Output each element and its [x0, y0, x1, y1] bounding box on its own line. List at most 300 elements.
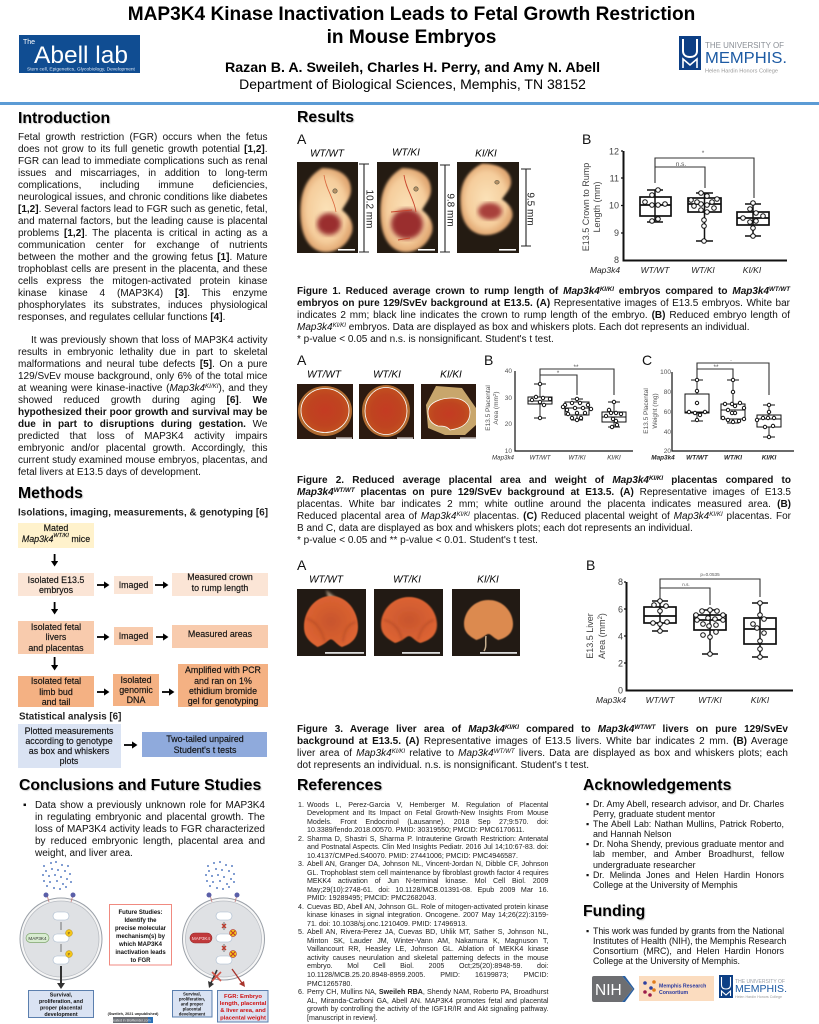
- figure 2C: placental weight box plot: Weight (mg): [652, 393, 659, 429]
- figure 2B: placental area box plot: 40: [505, 368, 512, 375]
- heading: Acknowledgements: Acknowledgements: [583, 777, 731, 794]
- figure 3B: liver area box plot: B: [586, 557, 595, 573]
- callout: future studies: precise molecular: [115, 926, 167, 932]
- figure 2B: placental area box plot: ): [493, 391, 500, 394]
- figure 3B: liver area box plot: 4: [618, 632, 623, 642]
- figure 2C: placental weight box plot: Map3k4: [651, 454, 675, 462]
- logo: University of Memphis small: [719, 975, 787, 999]
- box: t tests: Two-tailed unpaired: [166, 734, 244, 744]
- figure 1B: crown to rump box plot: 10: [609, 200, 619, 210]
- figure 3B: liver area box plot: Map3k4: [596, 695, 626, 705]
- box: measured areas: Measured areas: [188, 629, 253, 639]
- text block: introduction paragraph 1: communication center for exchange of nutrients: [18, 240, 268, 251]
- text block: acknowledgements: Perry, graduate student mentor: [593, 809, 715, 819]
- text block: references: Abell AN, Rivera-Perez JA, Cuevas BD, Uhlik MT, Sather S, Johnson NL,: [307, 928, 548, 936]
- caption: figure 1: [297, 286, 790, 344]
- text block: acknowledgements: Dr. Noha Shendy, previous graduate mentor and: [593, 839, 784, 849]
- text block: references: GL. Trophoblast stem cell maintenance by fibroblast growth factor 4 requires: [307, 869, 548, 877]
- title: MAP3K4 Kinase Inactivation Leads to Fetal Growth Restriction: [128, 4, 695, 25]
- heading: References: References: [297, 777, 382, 794]
- heading: Funding: Funding: [583, 903, 645, 920]
- caption: figure 3: Figure 3. Average liver area of Map3k4KI/KI compared to Map3k4WT/WT livers on pure 129/SvEv: [297, 724, 788, 735]
- cell: normal: MAP3K4: [28, 936, 47, 941]
- figure 1A: embryo images: A: [297, 131, 307, 147]
- figure 2B: placental area box plot: 2: [492, 393, 497, 396]
- box: mated mice: mice: [69, 534, 90, 544]
- text block: funding: ▪: [586, 926, 589, 936]
- figure 3B: liver area box plot: p=0.0535: [700, 572, 720, 577]
- figure 2B: placental area box plot: **: [573, 364, 579, 371]
- text block: references: 5.: [298, 928, 304, 936]
- box: isolated livers and placentas: Isolated fetal: [31, 622, 81, 632]
- image: WT/WT placenta: [297, 384, 353, 439]
- text block: references: 1.: [298, 801, 304, 809]
- box: impaired outcome: placental: [183, 1006, 201, 1012]
- text block: references: 2.: [298, 835, 304, 843]
- logo: Memphis Research Consortium: [639, 976, 714, 1001]
- text block: references: Models. Front Endocrinol (Lausanne). 2018 Sep 27;9:570. doi:: [307, 818, 548, 826]
- box: FGR outcome: FGR: Embryo: [224, 994, 262, 1000]
- text block: references: Abell AN, Granger DA, Johnson NL, Vincent-Jordan N, Dibble CF, Johnson: [307, 860, 548, 868]
- caption: figure 2: Map3k4WT/WT placentas on pure 129/SvEv background at E13.5. (A) Representative images of E13.5: [297, 487, 791, 498]
- text block: acknowledgements: College at the University of Memphis: [593, 880, 738, 890]
- rule: header divider: [0, 102, 819, 104]
- box: normal outcome: development: [44, 1012, 78, 1018]
- figure 2C: placental weight box plot: KI/KI: [762, 454, 776, 462]
- logo: University of Memphis small: MEMPHIS.: [735, 984, 787, 995]
- figure 1A: embryo images: WT/WT: [310, 148, 345, 160]
- text block: references: 10.1128/MCB.25.20.8948-8959.2005. PMID: 16199873; PMCID:: [307, 971, 548, 979]
- caption: figure 1: * p-value < 0.05 and n.s. is nonsignificant. Student's t test.: [297, 334, 554, 344]
- heading: Results: Results: [297, 109, 354, 126]
- text block: references: 10.4137/CMPed.S40070. PMID: 27441006; PMCID: PMC4946587.: [307, 852, 518, 860]
- text block: introduction paragraph 2: [18, 335, 268, 478]
- text block: introduction paragraph 1: kinase kinase 4 (MAP3K4) [3]. This enzyme: [18, 288, 268, 299]
- caption: figure 1: indicates 2 mm; black line indicates the crown to rump length of the embryo. (B) Reduced embryo length of: [297, 310, 790, 320]
- figure 3B: liver area box plot: 8: [618, 577, 623, 587]
- text block: introduction paragraph 2: predicted that loss of MAP3K4 activity impairs: [18, 431, 268, 442]
- text block: references: kinase kinases in signal integration. Oncogene. 2007 May 14;26(22):3159-: [307, 911, 548, 919]
- box: t tests: [142, 732, 267, 757]
- figure 1B: crown to rump box plot: KI/KI: [743, 265, 762, 275]
- figure 2B: placental area box plot: 20: [505, 421, 512, 428]
- callout: future studies: Identify the: [124, 918, 157, 924]
- image: KI/KI embryo: [457, 162, 519, 253]
- box: normal outcome: proper placental: [40, 1006, 82, 1012]
- figure 2C: placental weight box plot: 40: [664, 429, 671, 436]
- text block: conclusion bullet: ▪: [23, 800, 27, 811]
- figure 1B: crown to rump box plot: *: [702, 150, 705, 157]
- text block: introduction paragraph 2: embryonic and/or placental growth. Accordingly, this: [18, 443, 268, 454]
- text block: acknowledgements: [586, 798, 784, 890]
- text block: introduction paragraph 1: trophoblast cells are present in the placenta, and these: [18, 264, 268, 275]
- box: plotted measurements: as box and whiskers: [29, 746, 110, 756]
- logo: Memphis Research Consortium: Memphis Research: [659, 984, 706, 990]
- figure 2B: placental area box plot: Map3k4: [492, 454, 515, 462]
- logo: Abell lab: Stem cell, Epigenetics, Glycobiology, Development: [27, 66, 136, 72]
- text block: introduction paragraph 1: does not grow to its full genetic growth potential [1,2].: [18, 144, 268, 155]
- text block: references: 10.3389/fendo.2018.00570. PMID: 30319550; PMCID: PMC6170611.: [307, 826, 525, 834]
- text block: introduction paragraph 2: showed reduced growth during aging [6]. We: [18, 395, 268, 406]
- figure 2A: placenta images: A: [297, 352, 307, 368]
- text block: references: and Postnatal Aspects. Clin Med Insights Pediatr. 2016 Jul 14;10:67-83. doi:: [307, 843, 548, 851]
- text block: references: [298, 801, 548, 1022]
- text block: introduction paragraph 2: current study examined mouse embryos, placentas, and: [18, 455, 268, 466]
- text block: introduction paragraph 1: FGR can lead to immediate complications such as renal: [18, 156, 268, 167]
- figure 2B: placental area box plot: Area (mm: [493, 396, 500, 425]
- figure 2C: placental weight box plot: **: [713, 364, 719, 371]
- box: FGR outcome: placental weight: [220, 1016, 266, 1022]
- credit: BioRender: (Sweileh, 2021 unpublished): [108, 1012, 159, 1016]
- box: t tests: Student's t tests: [174, 745, 237, 755]
- image: WT/KI liver: [374, 589, 443, 656]
- text block: introduction paragraph 1: and maternal factors, but the leading cause is placental: [18, 216, 268, 227]
- image: WT/WT embryo: [297, 162, 358, 253]
- text block: acknowledgements: and Hannah Nelson: [593, 829, 671, 839]
- figure 2C: placental weight box plot: .: [730, 356, 732, 363]
- box: PCR genotyping: and ran on 1%: [194, 676, 252, 686]
- text block: references: Minton SK, Lauder JM, Winter-Vann AM, Nakamura K, Magnuson T,: [307, 937, 548, 945]
- box: PCR genotyping: Amplified with PCR: [185, 665, 261, 675]
- arrows: flow: [55, 554, 173, 745]
- text block: introduction paragraph 2: at weaning were kinase-inactive (Map3k4KI/KI), and they: [18, 383, 267, 394]
- text block: acknowledgements: Dr. Melinda Jones and Helen Hardin Honors: [593, 870, 784, 880]
- figure 1A: embryo images: [297, 131, 536, 254]
- caption: figure 2: Reduced placental area of Map3k4KI/KI placentas. (C) Reduced placental weight of Map3k4KI/KI placentas. For: [297, 511, 791, 522]
- figure 3B: liver area box plot: ): [597, 613, 607, 616]
- figure 2B: placental area box plot: [484, 352, 633, 462]
- box: isolated embryos: [18, 573, 94, 596]
- box: isolated genomic DNA: Isolated: [120, 675, 152, 685]
- caption: figure 2: [297, 475, 791, 546]
- image: WT/KI placenta: [359, 384, 414, 439]
- figure 2C: placental weight box plot: WT/WT: [686, 454, 709, 462]
- text block: references: Perry CH, Mullins NA, Sweileh RBA, Shendy NAM, Roberto PA, Broadhurst: [307, 988, 548, 996]
- figure 2C: placental weight box plot: 80: [664, 389, 671, 396]
- box: isolated embryos: embryos: [39, 585, 74, 595]
- text block: introduction paragraph 1: problems [1,2]. The placenta is critical in acting as a: [18, 228, 268, 239]
- figure 3B: liver area box plot: 0: [618, 686, 623, 696]
- box: PCR genotyping: ethidium bromide: [189, 686, 257, 696]
- text block: introduction paragraph 1: [1,2]. Several factors lead to FGR such as genetic, fetal,: [18, 204, 268, 215]
- box: plotted measurements: according to genotype: [25, 736, 113, 746]
- text block: references: 4.: [298, 903, 304, 911]
- box: impaired outcome: and proper: [181, 1002, 204, 1006]
- box: normal outcome: [28, 990, 94, 1018]
- logo: University of Memphis: THE UNIVERSITY OF: [705, 41, 784, 50]
- figure 2C: placental weight box plot: 20: [664, 448, 671, 455]
- box: isolated embryos: Isolated E13.5: [28, 575, 84, 585]
- callout: future studies: Future Studies:: [118, 910, 163, 916]
- figure 3A: liver images: WT/KI: [393, 574, 421, 586]
- figure 3A: liver images: WT/WT: [309, 574, 344, 586]
- text block: references: Woods L, Perez-Garcia V, Hemberger M. Regulation of Placental: [307, 801, 548, 809]
- logo: University of Memphis small: Helen Hardin Honors College: [735, 995, 782, 999]
- callout: future studies: [110, 904, 172, 965]
- text block: introduction paragraph 1: Fetal growth restriction (FGR) occurs when the fetus: [18, 132, 268, 143]
- figure 1B: crown to rump box plot: [581, 131, 787, 275]
- figure 2A: placenta images: KI/KI: [440, 370, 462, 380]
- figure 2B: placental area box plot: WT/KI: [568, 454, 586, 462]
- box: mated mice: Map3k4: [22, 534, 53, 544]
- figure 2B: placental area box plot: E13.5 Placental: [485, 385, 492, 431]
- box: isolated livers and placentas: livers: [46, 632, 67, 642]
- figure 1A: embryo images: 9.8 mm: [444, 193, 456, 227]
- figure 3B: liver area box plot: n.s.: [682, 582, 690, 587]
- logo: Memphis Research Consortium: Consortium: [659, 990, 688, 996]
- subheading: statistical analysis: Statistical analysis [6]: [19, 712, 121, 722]
- text block: acknowledgements: Dr. Amy Abell, research advisor, and Dr. Charles: [593, 798, 784, 808]
- text block: funding: College at the University of Memphis.: [593, 956, 740, 966]
- logo: NIH: NIH: [595, 982, 622, 999]
- figure 1A: embryo images: 9.5 mm: [524, 192, 536, 226]
- figure 3B: liver area box plot: E13.5 Liver: [585, 613, 595, 659]
- logo: Abell lab: The: [23, 39, 35, 46]
- box: imaged 2: [114, 627, 153, 645]
- text block: references: PMID: 19289495; PMCID: PMC2682043.: [307, 894, 436, 902]
- box: isolated genomic DNA: [113, 674, 159, 706]
- figure 2B: placental area box plot: WT/WT: [530, 454, 552, 462]
- figure 3B: liver area box plot: 2: [598, 615, 604, 619]
- text block: introduction paragraph 1: issues and miscarriages, in addition to long-term: [18, 168, 268, 179]
- title: [128, 4, 695, 48]
- title: in Mouse Embryos: [327, 27, 496, 48]
- text block: references: embryo. Mol Cell Biol. 2005 Oct;25(20):8948-59. doi:: [307, 962, 548, 970]
- figure 2B: placental area box plot: KI/KI: [607, 454, 621, 462]
- figure 2A: placenta images: [297, 352, 476, 439]
- text block: introduction paragraph 1: cells express the mitogen-activated protein kinase: [18, 276, 268, 287]
- figure 1B: crown to rump box plot: 8: [614, 255, 619, 265]
- box: mated mice: Mated: [44, 523, 68, 533]
- box: normal outcome: proliferation, and: [39, 999, 83, 1005]
- cell: normal: P: [68, 952, 71, 956]
- box: isolated limb bud: limb bud: [39, 687, 73, 697]
- box: measured crown to rump: Measured crown: [187, 572, 253, 582]
- credit: BioRender: [108, 1012, 159, 1023]
- caption: figure 2: * p-value < 0.05 and ** p-value < 0.01. Student's t test.: [297, 535, 538, 546]
- text block: references: activity causes neurulation and skeletal patterning defects in the mouse: [307, 954, 548, 962]
- text block: conclusion bullet: Data show a previously unknown role for MAP3K4: [35, 800, 265, 811]
- box: imaged 1: Imaged: [119, 580, 148, 590]
- caption: figure 1: Figure 1. Reduced average crown to rump length of Map3k4KI/KI embryos compared to Map3k4WT/WT: [297, 286, 790, 296]
- caption: figure 3: [297, 724, 788, 771]
- box: imaged 2: Imaged: [119, 631, 148, 641]
- text block: acknowledgements: The Abell Lab: Nathan Mullins, Patrick Roberto,: [593, 819, 784, 829]
- text block: conclusion bullet: in regulating embryonic and placental growth. The: [35, 812, 265, 823]
- text block: introduction paragraph 2: It was previously shown that loss of MAP3K4 activity: [31, 335, 268, 346]
- text block: references: AL, Miranda-Carboni GA, Abell AN. MAP3K4 promotes fetal and placental: [307, 997, 548, 1005]
- text block: references: 6.: [298, 988, 304, 996]
- text block: references: 3.: [298, 860, 304, 868]
- text block: funding: Consortium (MRC), and Helen Hardin Honors: [593, 946, 784, 956]
- cell: MAP3K4 inactive: [182, 861, 264, 988]
- logo: University of Memphis: MEMPHIS.: [705, 50, 787, 67]
- text block: introduction paragraph 2: fetal livers at E13.5 days of development.: [18, 467, 201, 478]
- text block: introduction paragraph 1: neurological issues, and chronic conditions like diabetes: [18, 192, 268, 203]
- box: plotted measurements: [18, 724, 121, 768]
- flow chart: methods: [18, 508, 268, 768]
- text block: references: PMC1265780.: [307, 980, 352, 988]
- text block: acknowledgements: ▪: [586, 819, 589, 829]
- box: FGR outcome: & liver area, and: [220, 1008, 266, 1014]
- text block: acknowledgements: ▪: [586, 870, 589, 880]
- logo: University of Memphis: Helen Hardin Honors College: [705, 68, 778, 74]
- box: isolated limb bud: and tail: [42, 697, 70, 707]
- figure 3B: liver area box plot: KI/KI: [751, 695, 770, 705]
- caption: figure 3: dot represents an individual. n.s. is nonsignificant. Student's t test.: [297, 760, 589, 771]
- figure 2C: placental weight box plot: 60: [664, 409, 671, 416]
- figure 2B: placental area box plot: B: [484, 352, 493, 368]
- text block: introduction paragraph 1: responses, and regulates cellular functions [4].: [18, 312, 225, 323]
- box: PCR genotyping: [178, 664, 268, 707]
- figure 1B: crown to rump box plot: Map3k4: [590, 265, 620, 275]
- affiliation: Department of Biological Sciences, Memphis, TN 38152: [239, 76, 586, 92]
- text block: funding: [586, 926, 786, 966]
- text block: funding: Institutes of Health (NIH), the Memphis Research: [593, 936, 786, 946]
- figure 1A: embryo images: KI/KI: [475, 148, 497, 160]
- heading: Introduction: Introduction: [18, 110, 110, 127]
- diagram: signaling model: [20, 861, 268, 1023]
- figure 1A: embryo images: WT/KI: [392, 148, 420, 158]
- text block: introduction paragraph 2: 129/SvEv mouse background, only 6% of the total mice: [18, 371, 268, 382]
- cell: normal: P: [68, 930, 71, 936]
- text block: references: MEKK4 activation of Jun N-terminal kinase. Mol Cell Biol. 2009: [307, 877, 548, 885]
- text block: introduction paragraph 2: hypothesized their poor growth and survival may be: [18, 407, 268, 418]
- figure 3B: liver area box plot: Area (mm: [597, 619, 607, 659]
- text block: introduction paragraph 1: between the mother and the growing fetus [1]. Mature: [18, 252, 268, 263]
- figure 3B: liver area box plot: 6: [618, 604, 623, 614]
- image: KI/KI liver: [452, 589, 520, 656]
- box: impaired outcome: development: [179, 1012, 206, 1016]
- image: WT/WT liver: [297, 589, 366, 656]
- logo: University of Memphis: [679, 36, 787, 74]
- text block: introduction paragraph 1: phosphorylates its substrates, induces physiological: [18, 300, 268, 311]
- text block: references: Vaillancourt RR, Heasley LE, Johnson GL. Ablation of MEKK4 kinase: [307, 945, 548, 953]
- box: mated mice: [18, 523, 94, 548]
- heading: Methods: Methods: [18, 485, 83, 502]
- text block: introduction paragraph 2: malformations and neural tube defects [5]. On a pure: [18, 359, 268, 370]
- text block: references: Cuevas BD, Abell AN, Johnson GL. Role of mitogen-activated protein kinase: [307, 903, 548, 911]
- figure 2C: placental weight box plot: WT/KI: [724, 454, 742, 462]
- text block: funding: This work was funded by grants from the National: [593, 926, 784, 936]
- figure 1B: crown to rump box plot: Length (mm): [592, 181, 602, 233]
- box: isolated limb bud: [18, 676, 94, 707]
- caption: figure 2: placentas. White bar indicates 2 mm; white outline around the placenta indicates measured area. (B): [297, 499, 791, 510]
- figure 3A: liver images: KI/KI: [477, 574, 499, 586]
- figure 3A: liver images: A: [297, 557, 307, 573]
- cell: MAP3K4 inactive: MAP3K4: [192, 936, 211, 941]
- figure 1B: crown to rump box plot: n.s.: [676, 161, 686, 168]
- figure 2C: placental weight box plot: 100: [660, 369, 671, 376]
- box: impaired outcome: [172, 990, 212, 1017]
- box: normal outcome: Survival,: [50, 992, 73, 998]
- text block: references: 71. doi: 10.1038/sj.onc.1210409. PMID: 17496913.: [307, 920, 467, 928]
- credit: BioRender: Created in BioRender.com: [109, 1018, 151, 1022]
- box: plotted measurements: plots: [60, 756, 79, 766]
- caption: figure 3: background at E13.5. (A) Representative images of E13.5 livers. White bar indicates 2 mm. (B) Average: [297, 736, 788, 747]
- text block: introduction paragraph 2: results in embryonic lethality due in part to skeletal: [18, 347, 268, 358]
- callout: future studies: to FGR: [130, 958, 151, 964]
- text block: acknowledgements: lab member, and Amber Broadhurst, fellow: [593, 849, 784, 859]
- text block: conclusion bullet: by reduced embryonic length, placental area and: [35, 836, 265, 847]
- text block: acknowledgements: ▪: [586, 798, 589, 808]
- figure 2B: placental area box plot: *: [557, 370, 560, 377]
- text block: references: growth by controlling the activity of the IGF1R/IR and Akt signaling pathway.: [307, 1005, 548, 1013]
- subheading: isolations: Isolations, imaging, measurements, & genotyping [6]: [18, 508, 268, 518]
- text block: acknowledgements: undergraduate researcher: [593, 860, 696, 870]
- text block: introduction paragraph 1: complications, including immune deficiencies,: [18, 180, 268, 191]
- figure 2C: placental weight box plot: C: [642, 352, 652, 368]
- box: impaired outcome: proliferation,: [179, 996, 205, 1002]
- text block: references: [manuscript in review].: [307, 1014, 378, 1022]
- box: measured crown to rump: to rump length: [192, 583, 248, 593]
- figure 1B: crown to rump box plot: 9: [614, 228, 619, 238]
- figure 1B: crown to rump box plot: B: [582, 131, 591, 147]
- figure 1B: crown to rump box plot: WT/KI: [691, 265, 715, 275]
- callout: future studies: inactivation leads: [115, 950, 166, 956]
- callout: future studies: mechanism(s) by: [116, 934, 166, 940]
- box: FGR outcome: length, placental: [220, 1001, 267, 1007]
- cell: normal: [20, 861, 102, 989]
- measurement bars: [359, 164, 531, 252]
- caption: figure 2: Figure 2. Reduced average placental area and weight of Map3k4KI/KI placentas compared to: [297, 475, 791, 486]
- figure 1B: crown to rump box plot: WT/WT: [641, 265, 670, 275]
- heading: Conclusions and Future Studies: Conclusions and Future Studies: [19, 777, 261, 794]
- text block: conclusion bullet: [23, 800, 265, 859]
- box: mated mice: WT/KI: [53, 533, 69, 539]
- text block: introduction paragraph 2: due in part to disruptions during gestation. We: [18, 419, 268, 430]
- box: FGR outcome: [218, 990, 268, 1022]
- caption: figure 3: liver area of Map3k4KI/KI relative to Map3k4WT/WT livers. Data are displayed as box and whiskers plots; each: [297, 748, 788, 759]
- box: isolated genomic DNA: genomic: [119, 685, 153, 695]
- logo: NIH: [592, 976, 634, 1002]
- text block: references: May;29(10):2748-61. doi: 10.1128/MCB.01391-08. Epub 2009 Mar 16.: [307, 886, 548, 894]
- figure 2B: placental area box plot: 30: [505, 395, 512, 402]
- figure 3B: liver area box plot: [585, 557, 793, 705]
- authors: Razan B. A. Sweileh, Charles H. Perry, and Amy N. Abell: [225, 60, 600, 76]
- caption: figure 1: Map3k4KI/KI embryos. Data are displayed as box and whiskers plots. Each dot represents an individual.: [297, 322, 750, 332]
- box: isolated livers and placentas: [18, 621, 94, 654]
- text block: conclusion bullet: loss of MAP3K4 activity leads to FGR characterized: [35, 824, 265, 835]
- logo: Abell lab: Abell lab: [34, 42, 128, 69]
- figure 2A: placenta images: WT/WT: [307, 370, 342, 380]
- box: measured areas: [172, 625, 268, 648]
- figure 3B: liver area box plot: WT/WT: [646, 695, 675, 705]
- text block: references: Development and Its Impact on Fetal Growth-New Insights From Mouse: [307, 809, 548, 817]
- figure 2A: placenta images: WT/KI: [373, 370, 401, 380]
- box: imaged 1: [114, 576, 153, 594]
- box: isolated limb bud: Isolated fetal: [31, 676, 81, 686]
- figure 2B: placental area box plot: 10: [505, 448, 512, 455]
- figure 2C: placental weight box plot: [642, 352, 794, 462]
- figure 3B: liver area box plot: WT/KI: [698, 695, 722, 705]
- figure 1B: crown to rump box plot: 12: [609, 146, 619, 156]
- text block: introduction paragraph 1: [18, 132, 268, 323]
- box: PCR genotyping: gel for genotyping: [188, 696, 258, 706]
- caption: figure 1: embryos on pure 129/SvEv background at E13.5. (A) Representative images of E13.5 embryos. White bar: [297, 298, 790, 308]
- figure 2C: placental weight box plot: E13.5 Placental: [643, 388, 650, 434]
- box: impaired outcome: Survival,: [183, 992, 201, 996]
- text block: acknowledgements: ▪: [586, 839, 589, 849]
- box: isolated livers and placentas: and placentas: [28, 643, 84, 653]
- text block: references: Sharma D, Shastri S, Sharma P. Intrauterine Growth Restriction: Antenatal: [307, 835, 548, 843]
- figure 3A: liver images: [297, 557, 520, 656]
- figure 1A: embryo images: 10.2 mm: [364, 190, 374, 228]
- image: KI/KI placenta: [421, 384, 476, 439]
- logo: Abell lab: [19, 35, 140, 73]
- box: isolated genomic DNA: DNA: [127, 695, 145, 705]
- figure 3B: liver area box plot: 2: [618, 658, 623, 668]
